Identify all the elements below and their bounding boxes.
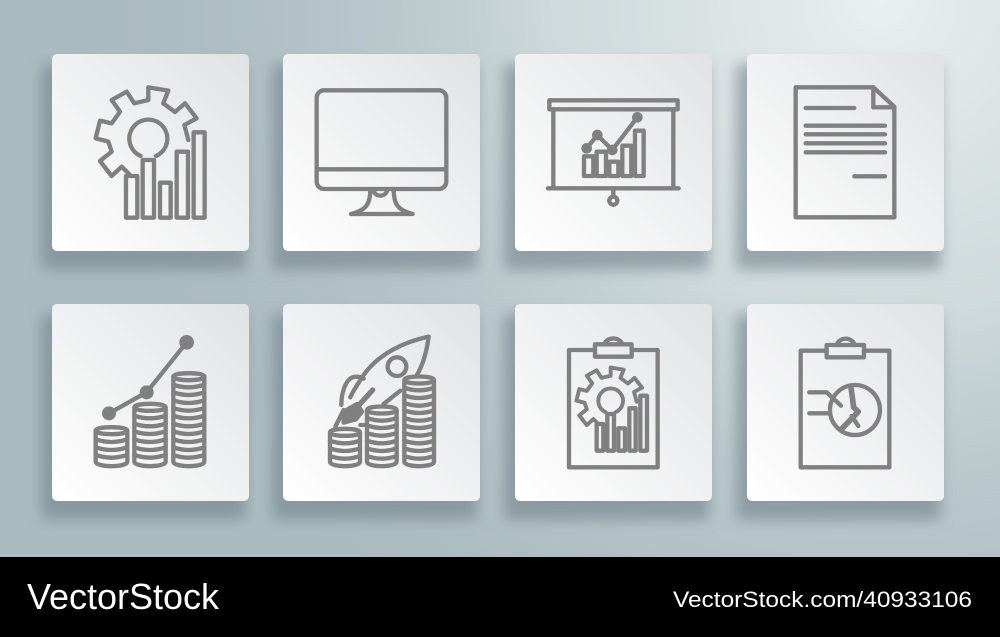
icon: clipboard with gear and bars bbox=[569, 338, 658, 467]
footer bar bbox=[0, 557, 1000, 637]
panel: presentation board card bbox=[515, 54, 712, 251]
panel: clipboard with gear card bbox=[515, 304, 712, 501]
icon: rocket over coin stacks bbox=[330, 337, 434, 466]
panel: coins growth card bbox=[52, 304, 249, 501]
brand wordmark: VectorStock bbox=[27, 576, 220, 617]
panel: rocket and coins card bbox=[283, 304, 480, 501]
icon: desktop monitor bbox=[317, 90, 446, 214]
icon: coin stacks with growth line bbox=[96, 338, 204, 466]
panel: gear and bar chart card bbox=[52, 54, 249, 251]
icon: presentation board with chart bbox=[548, 100, 679, 205]
panel: clipboard with pie chart card bbox=[747, 304, 944, 501]
icon: gear with bar chart bbox=[96, 87, 205, 218]
panel: document card bbox=[747, 54, 944, 251]
icon: text document bbox=[796, 87, 894, 217]
panel: monitor card bbox=[283, 54, 480, 251]
image id url: VectorStock.com/40933106 bbox=[673, 587, 972, 612]
card shadows bbox=[41, 64, 941, 520]
icon: clipboard with pie chart bbox=[801, 339, 889, 467]
